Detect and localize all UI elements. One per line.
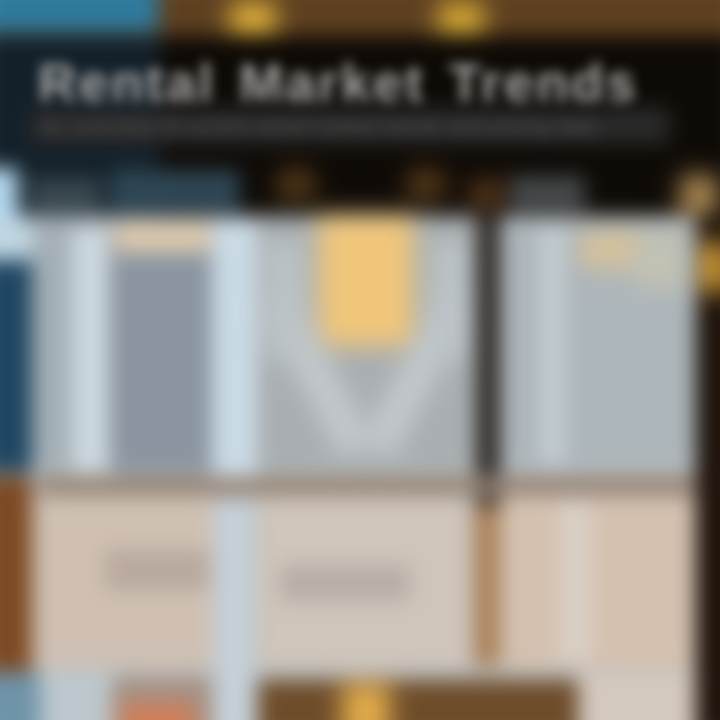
panel: left glass xyxy=(110,230,215,472)
left column xyxy=(0,218,40,260)
vertical pale column xyxy=(212,220,256,490)
lower pale column xyxy=(214,500,254,720)
brown horizontal band xyxy=(40,477,695,495)
panel: centre glass xyxy=(258,220,473,470)
title: Rental Market Trends xyxy=(38,54,638,113)
panel: lower right xyxy=(502,498,696,668)
top strip: sky and wood ceiling xyxy=(0,0,720,38)
panel: lower left xyxy=(32,498,215,668)
dark divider xyxy=(476,216,500,506)
bottom strip xyxy=(40,670,112,720)
centre warm light xyxy=(318,216,414,346)
lower divider xyxy=(474,506,500,666)
band details below title xyxy=(0,168,18,238)
centre pale chevrons xyxy=(262,292,372,458)
right edge xyxy=(696,216,720,720)
panel: right glass xyxy=(502,220,696,470)
panel: lower centre xyxy=(258,498,470,668)
ceiling lights xyxy=(230,2,276,38)
dark title band xyxy=(0,36,160,216)
subtitle: An overview of current rental market trends and pricing data xyxy=(40,116,597,139)
